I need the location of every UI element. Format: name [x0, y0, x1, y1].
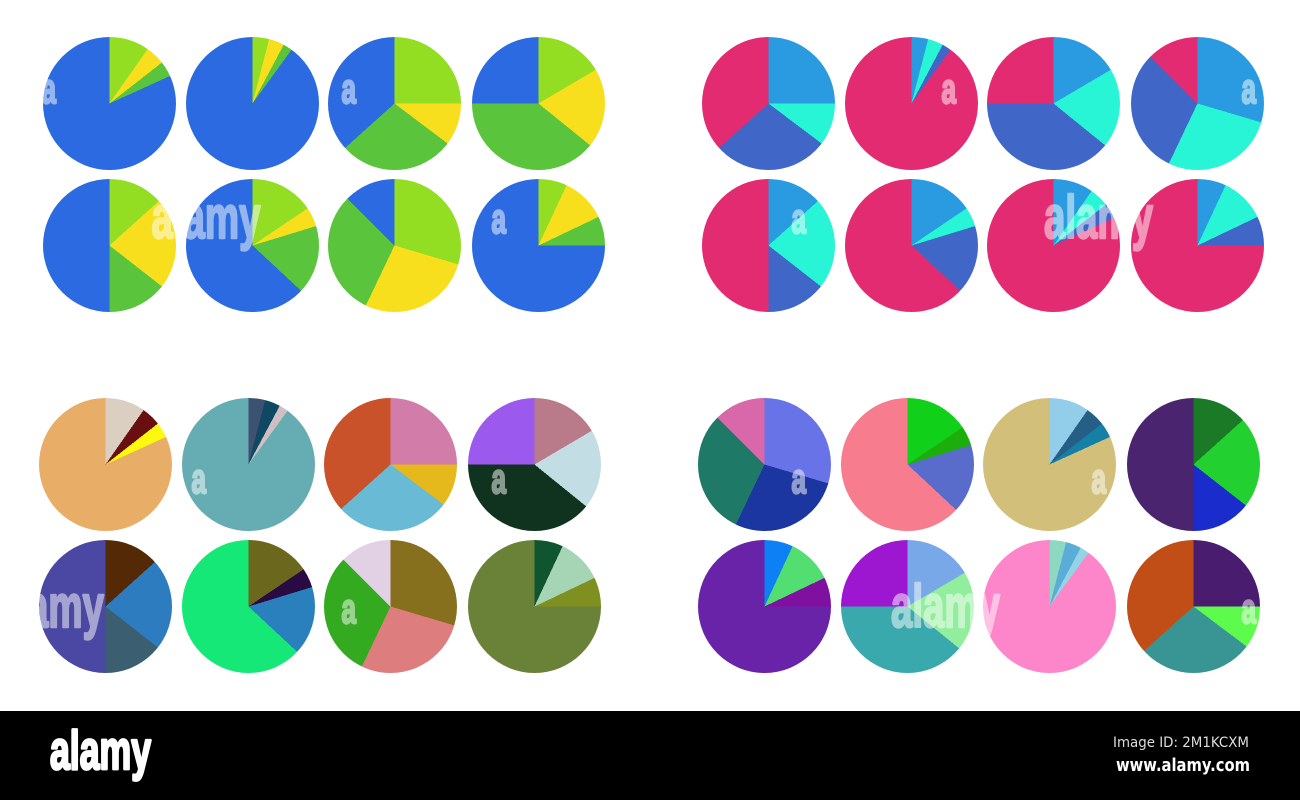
- pie chart 6: [186, 179, 319, 312]
- watermark overlay: a: [192, 455, 206, 502]
- watermark overlay: a: [792, 455, 806, 502]
- footer bar: [0, 711, 1300, 800]
- pie chart 8: [472, 179, 605, 312]
- pie chart 2: [840, 398, 974, 531]
- watermark overlay: a: [42, 65, 56, 112]
- pie chart 2: [182, 398, 314, 531]
- pie chart 5: [698, 540, 830, 673]
- pie chart 3: [987, 37, 1120, 170]
- pie chart 1: [38, 398, 172, 531]
- watermark overlay: a: [1092, 455, 1106, 502]
- pie chart 2: [845, 37, 978, 170]
- watermark overlay: alamy: [0, 573, 104, 640]
- logo: alamy: alamy: [50, 719, 151, 781]
- pie chart 5: [702, 179, 834, 312]
- watermark overlay: a: [792, 195, 806, 242]
- watermark overlay: alamy: [891, 573, 1000, 640]
- image id: Image ID: 2M1KCXM: [1113, 735, 1249, 751]
- pie chart 6: [840, 540, 974, 673]
- pie chart 6: [182, 540, 314, 673]
- watermark overlay: alamy: [1044, 184, 1153, 251]
- pie chart 5: [42, 179, 176, 312]
- watermark overlay: a: [492, 455, 506, 502]
- pie chart 1: [698, 398, 830, 531]
- watermark overlay: a: [1242, 585, 1256, 632]
- pie chart 7: [328, 179, 461, 312]
- pie chart 7: [324, 540, 456, 673]
- watermark overlay: a: [942, 65, 956, 112]
- pie chart 3: [982, 398, 1116, 531]
- pie chart 2: [186, 37, 319, 170]
- pie chart 7: [982, 540, 1116, 673]
- watermark overlay: a: [492, 195, 506, 242]
- website: www.alamy.com: [1116, 756, 1250, 776]
- watermark overlay: a: [342, 585, 356, 632]
- pie chart 8: [468, 540, 600, 673]
- pie chart 7: [987, 179, 1120, 312]
- pie chart 8: [1127, 540, 1260, 673]
- pie chart 4: [472, 37, 605, 170]
- pie chart 4: [1131, 37, 1264, 170]
- pie chart 5: [38, 540, 172, 673]
- watermark overlay: a: [1242, 65, 1256, 112]
- watermark overlay: alamy: [152, 184, 261, 251]
- pie chart 3: [328, 37, 461, 170]
- pie chart 1: [42, 37, 176, 170]
- watermark overlay: a: [342, 65, 356, 112]
- pie chart 4: [1127, 398, 1260, 531]
- pie chart 6: [845, 179, 978, 312]
- pie chart 3: [324, 398, 456, 531]
- pie chart 8: [1131, 179, 1264, 312]
- pie chart 1: [702, 37, 834, 170]
- pie chart 4: [468, 398, 600, 531]
